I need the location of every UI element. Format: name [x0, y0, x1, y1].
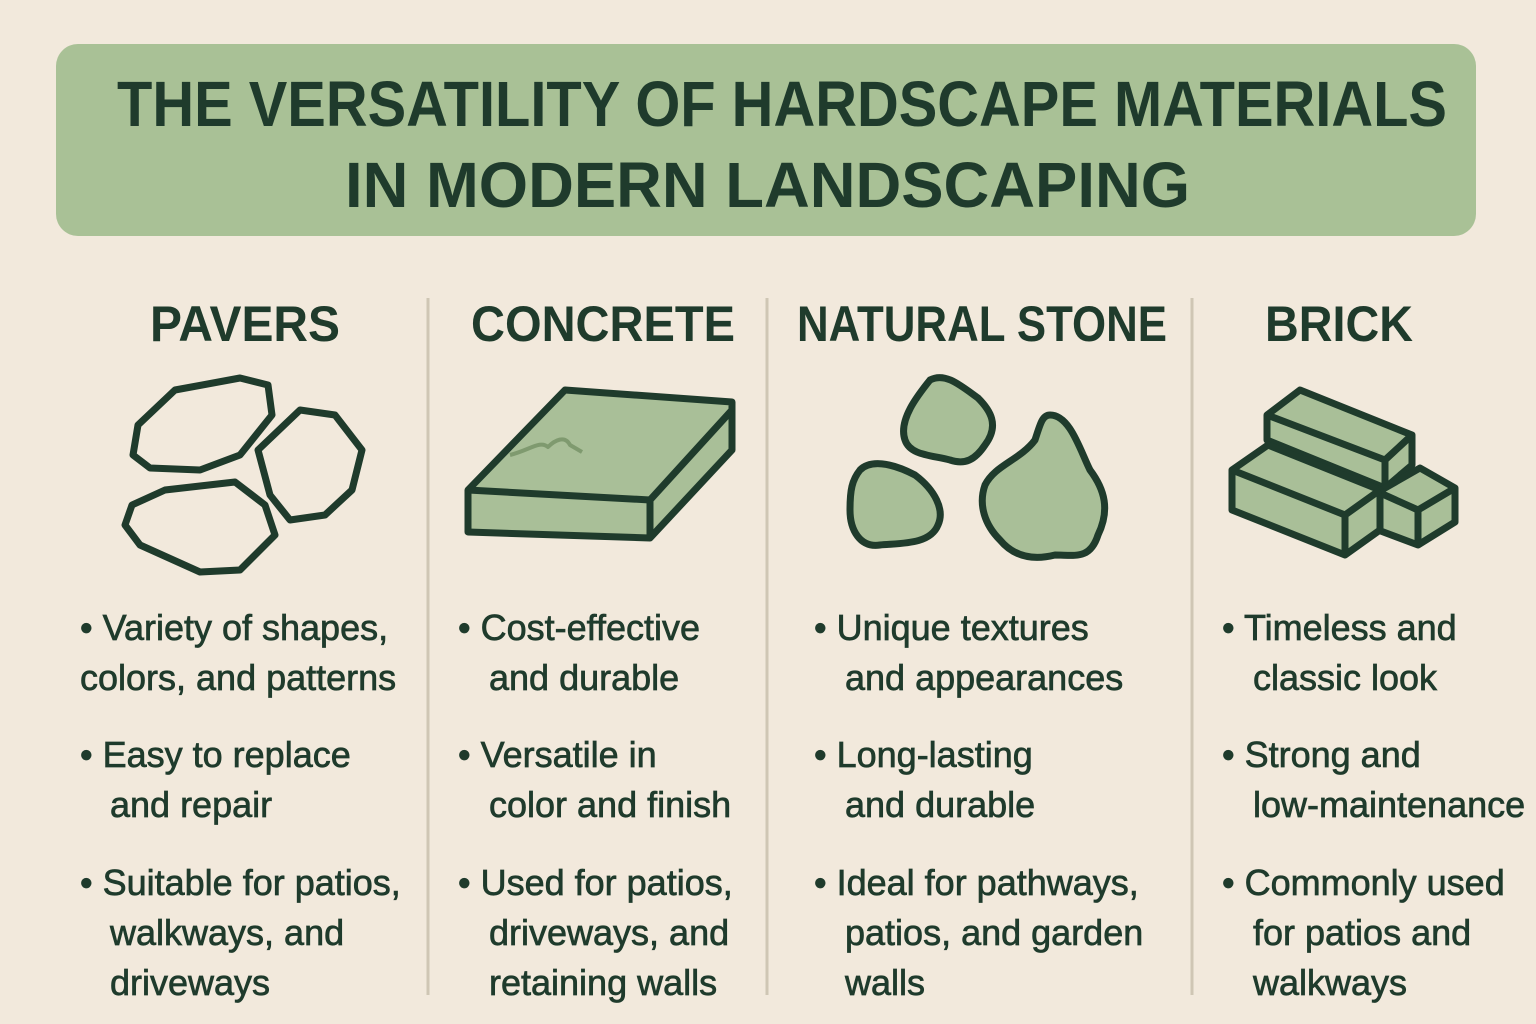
bullets: brick: walkways: [1252, 962, 1407, 1003]
bullets: brick: • Strong and: [1222, 734, 1421, 775]
icon: natural stones: [850, 378, 1105, 557]
bullets: pavers: • Suitable for patios,: [80, 862, 401, 903]
heading: pavers: PAVERS: [150, 296, 340, 352]
bullets: concrete: color and finish: [489, 784, 731, 825]
panel: concrete: [458, 296, 735, 1003]
bullets: brick: [1222, 607, 1525, 1003]
bullets: concrete: • Cost-effective: [458, 607, 700, 648]
bullets: pavers: • Easy to replace: [80, 734, 351, 775]
title: [56, 44, 1476, 236]
bullets: concrete: driveways, and: [489, 912, 729, 953]
panel: natural stone: [797, 296, 1167, 1003]
bullets: pavers: colors, and patterns: [80, 657, 396, 698]
bullets: pavers: and repair: [110, 784, 272, 825]
bullets: pavers: • Variety of shapes,: [80, 607, 388, 648]
bullets: brick: • Commonly used: [1222, 862, 1505, 903]
bullets: pavers: walkways, and: [109, 912, 344, 953]
bullets: natural stone: walls: [844, 962, 925, 1003]
heading: natural stone: NATURAL STONE: [797, 296, 1167, 352]
bullets: natural stone: • Long-lasting: [814, 734, 1033, 775]
title: IN MODERN LANDSCAPING: [345, 149, 1190, 221]
bullets: brick: low-maintenance: [1253, 784, 1525, 825]
bullets: brick: classic look: [1253, 657, 1438, 698]
bullets: natural stone: [814, 607, 1143, 1003]
bullets: natural stone: patios, and garden: [845, 912, 1143, 953]
bullets: concrete: retaining walls: [489, 962, 717, 1003]
icon: bricks: [1232, 390, 1455, 555]
bullets: natural stone: and appearances: [845, 657, 1123, 698]
bullets: concrete: • Versatile in: [458, 734, 657, 775]
panel: brick: [1222, 296, 1525, 1003]
heading: concrete: CONCRETE: [471, 296, 735, 352]
heading: brick: BRICK: [1265, 296, 1413, 352]
bullets: concrete: and durable: [489, 657, 679, 698]
icon: concrete slab: [468, 390, 732, 538]
panel: pavers: [80, 296, 401, 1003]
bullets: pavers: [80, 607, 401, 1003]
bullets: brick: • Timeless and: [1222, 607, 1457, 648]
bullets: brick: for patios and: [1253, 912, 1471, 953]
bullets: natural stone: and durable: [845, 784, 1035, 825]
icon: pavers: [125, 378, 362, 572]
bullets: concrete: • Used for patios,: [458, 862, 733, 903]
bullets: natural stone: • Unique textures: [814, 607, 1089, 648]
bullets: pavers: driveways: [110, 962, 270, 1003]
bullets: concrete: [458, 607, 733, 1003]
bullets: natural stone: • Ideal for pathways,: [814, 862, 1139, 903]
